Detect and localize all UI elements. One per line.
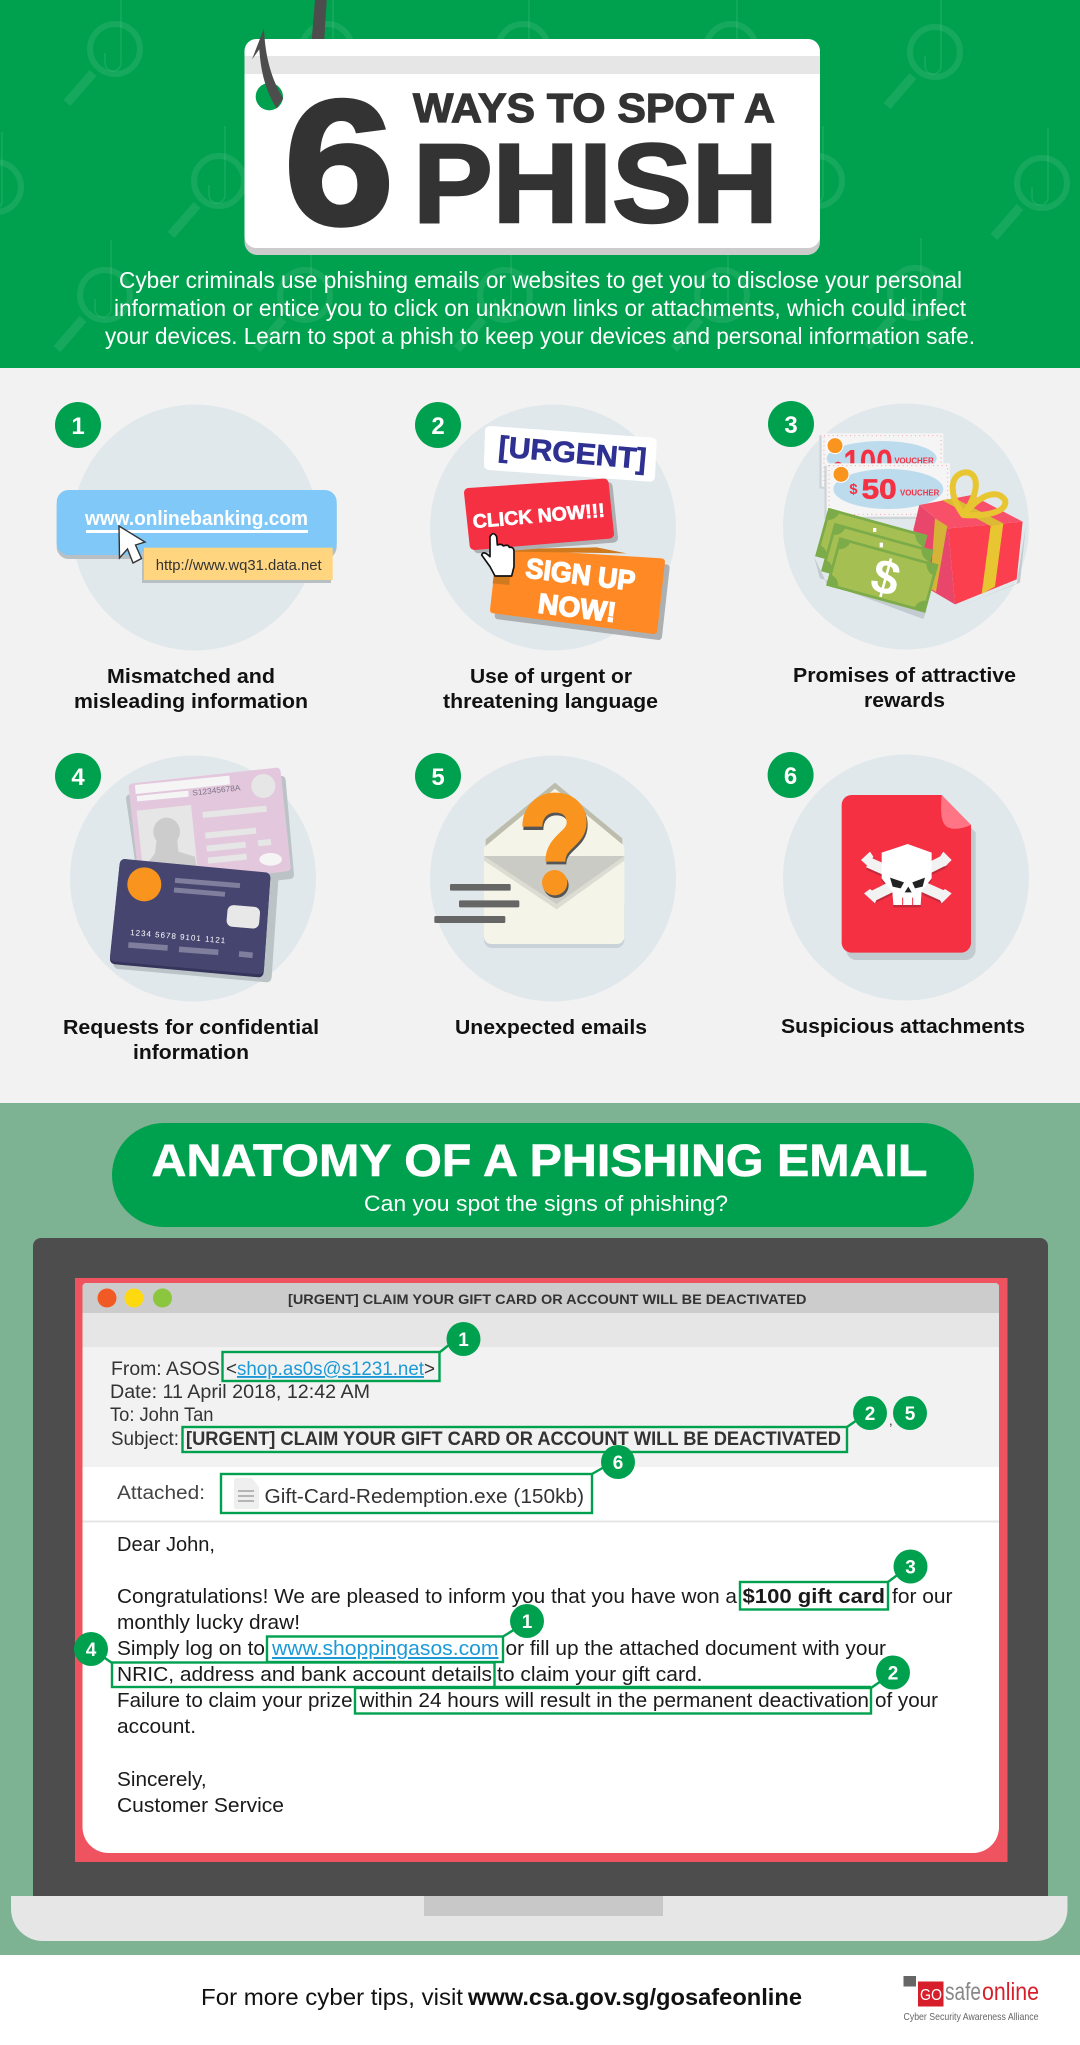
label 4 (63, 1017, 319, 1064)
annotation: sender address (222, 1322, 480, 1381)
email body: monthly lucky draw! (117, 1611, 300, 1634)
heading: ANATOMY OF A PHISHING EMAIL (152, 1135, 928, 1186)
icon: envelope with question mark (434, 783, 624, 948)
laptop lid (33, 1238, 1048, 1896)
icon: mismatched url: http://www.wq31.data.net (156, 557, 323, 574)
sign 1 (55, 402, 337, 713)
logo: go safe online: Cyber Security Awareness Alliance (904, 2011, 1039, 2023)
badge 2 (415, 402, 461, 448)
voucher 100: 100 (843, 442, 893, 483)
panel: six signs (0, 368, 1080, 1103)
email body: or fill up the attached document with your (506, 1637, 886, 1660)
email body: www.shoppingasos.com (271, 1637, 498, 1660)
money: $ (865, 548, 906, 608)
annotation: gift card: 3 (905, 1558, 916, 1578)
voucher 100: VOUCHER (894, 457, 934, 466)
title number: 6 (284, 63, 394, 262)
voucher 50: VOUCHER (900, 489, 940, 498)
label 1 (74, 666, 308, 713)
annotation: subject: , (889, 1413, 893, 1428)
annotation: subject (182, 1396, 927, 1452)
badge 5: 5 (431, 764, 445, 791)
attachment row (117, 1478, 584, 1509)
icon: hook through card (252, 28, 283, 110)
email body (117, 1533, 953, 1817)
label 4: Requests for confidential (63, 1017, 319, 1039)
icon: vouchers, money and gift (800, 433, 1026, 627)
panel: anatomy background (0, 1103, 1080, 1955)
annotation: personal details: 4 (86, 1640, 97, 1661)
question mark (532, 803, 578, 898)
email headers: To: John Tan (110, 1405, 214, 1426)
icon: mismatched url (57, 490, 337, 583)
voucher 100: $ (833, 458, 843, 477)
label 3 (793, 665, 1016, 712)
footer text: www.csa.gov.sg/gosafeonline (467, 1984, 802, 2010)
email headers: [URGENT] CLAIM YOUR GIFT CARD OR ACCOUNT WILL BE DEACTIVATED (186, 1429, 841, 1450)
badge 1 (55, 402, 101, 448)
laptop base (11, 1896, 1068, 1941)
laptop (11, 1238, 1068, 1941)
gift (913, 472, 1026, 607)
label 2: threatening language (443, 691, 658, 713)
email body: account. (117, 1715, 196, 1738)
badge 2: 2 (431, 413, 445, 440)
id card (130, 772, 290, 892)
email body: to claim your gift card. (497, 1663, 702, 1686)
badge 3: 3 (784, 412, 798, 439)
email body: Simply log on to (117, 1637, 265, 1660)
email body: Congratulations! We are pleased to inform you that you have won a (117, 1585, 738, 1608)
intro text (105, 267, 975, 349)
title line 2: PHISH (413, 121, 778, 246)
intro text: Cyber criminals use phishing emails or websites to get you to disclose your personal (119, 267, 962, 293)
badge 4: 4 (71, 764, 85, 791)
attachment row: Attached: (117, 1483, 205, 1504)
screen (75, 1278, 1008, 1862)
annotation: attachment (221, 1445, 635, 1513)
icon: urgent buttons: [URGENT] (497, 430, 648, 476)
voucher 50 (824, 463, 950, 519)
window title bar: [URGENT] CLAIM YOUR GIFT CARD OR ACCOUNT WILL BE DEACTIVATED (288, 1292, 807, 1307)
label 3: rewards (864, 690, 945, 712)
logo: go safe online: safe (945, 1978, 981, 2006)
label 5: Unexpected emails (455, 1017, 647, 1039)
label 1: misleading information (74, 691, 308, 713)
annotation: gift card (740, 1550, 928, 1610)
icon: urgent buttons: NOW! (536, 588, 618, 628)
email body: for our (892, 1585, 953, 1608)
sign 3 (768, 401, 1029, 712)
icon: urgent buttons (469, 430, 666, 637)
sign 4 (55, 753, 319, 1064)
annotation: threat: 2 (888, 1664, 898, 1684)
heading pill (112, 1123, 974, 1227)
email headers: Subject: (111, 1429, 179, 1450)
icon: urgent buttons: SIGN UP (524, 552, 637, 597)
intro text: information or entice you to click on unknown links or attachments, which could infect (114, 295, 967, 321)
email body: Customer Service (117, 1794, 284, 1817)
footer text (201, 1984, 802, 2010)
annotation: sender address: 1 (458, 1330, 469, 1351)
icon: malicious attachment (842, 795, 976, 960)
sign 2 (415, 402, 676, 713)
annotation: link (267, 1604, 544, 1662)
email headers (110, 1359, 841, 1450)
speed lines (434, 884, 519, 923)
email body: Sincerely, (117, 1768, 207, 1791)
money (800, 493, 953, 627)
label 1: Mismatched and (107, 666, 275, 688)
title card (244, 28, 820, 262)
label 2 (443, 666, 658, 713)
email headers: <shop.as0s@s1231.net> (226, 1359, 435, 1380)
icon: id and bank cards (115, 772, 290, 977)
badge 6: 6 (784, 763, 797, 790)
badge 5 (415, 753, 461, 799)
badge 3 (768, 401, 814, 447)
attachment row: Gift-Card-Redemption.exe (150kb) (264, 1486, 584, 1508)
intro text: your devices. Learn to spot a phish to keep your devices and personal information safe. (105, 323, 975, 349)
email body: Failure to claim your prize (117, 1689, 353, 1712)
badge 6 (768, 752, 814, 798)
annotation: subject: 2 (865, 1404, 875, 1425)
email body: within 24 hours will result in the permanent deactivation (358, 1689, 869, 1712)
annotation: personal details (74, 1632, 494, 1687)
annotation: subject: 5 (905, 1404, 916, 1425)
email body: of your (875, 1689, 938, 1712)
id card: S12345678A (192, 783, 242, 798)
label 6: Suspicious attachments (781, 1016, 1025, 1038)
logo: go safe online: online (982, 1978, 1039, 2006)
annotation: link: 1 (522, 1612, 533, 1633)
email body: Dear John, (117, 1533, 215, 1556)
email headers: Date: 11 April 2018, 12:42 AM (110, 1382, 370, 1403)
label 2: Use of urgent or (470, 666, 632, 688)
logo: go safe online: GO (920, 1987, 942, 2004)
annotation: attachment: 6 (613, 1453, 623, 1474)
subheading: Can you spot the signs of phishing? (364, 1191, 728, 1216)
voucher 100 (819, 433, 943, 489)
label 3: Promises of attractive (793, 665, 1016, 687)
sign 5 (415, 753, 676, 1039)
footer (201, 1976, 1039, 2023)
icon: fishing line (312, 0, 327, 40)
badge 1: 1 (71, 413, 85, 440)
sign 6 (768, 752, 1029, 1038)
icon: mismatched url: www.onlinebanking.com (84, 508, 308, 530)
icon: file (234, 1478, 259, 1509)
bank card: 1234 5678 9101 1121 (130, 928, 226, 945)
voucher 50: 50 (862, 474, 897, 505)
annotation: threat (355, 1656, 910, 1714)
email headers: From: ASOS (111, 1359, 220, 1380)
bank card (115, 864, 273, 977)
email window (74, 1283, 999, 1853)
icon: urgent buttons: CLICK NOW!!! (472, 501, 606, 533)
footer text: For more cyber tips, visit (201, 1984, 464, 2010)
skull and crossbones (861, 844, 952, 907)
logo: go safe online (904, 1976, 1039, 2023)
header band (0, 0, 1080, 368)
badge 4 (55, 753, 101, 799)
voucher 50: $ (849, 482, 857, 498)
email body: NRIC, address and bank account details (117, 1663, 492, 1686)
window title bar (82, 1283, 999, 1313)
label 4: information (133, 1042, 249, 1064)
title line 1: WAYS TO SPOT A (413, 85, 775, 131)
email body: $100 gift card (742, 1585, 885, 1608)
